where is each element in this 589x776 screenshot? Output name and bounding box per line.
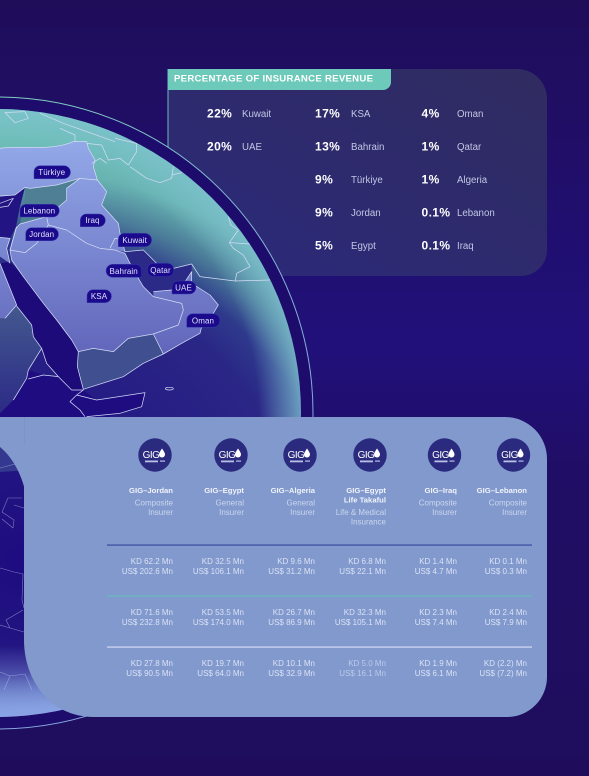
- column: GIG-Lebanon: US$ 0.3 Mn: [485, 567, 527, 576]
- column: GIG-Algeria: General: [287, 498, 315, 508]
- label: Qatar: Qatar: [150, 266, 171, 275]
- column: GIG-Iraq: Composite: [419, 498, 458, 508]
- column: GIG-Jordan: Insurer: [148, 508, 173, 517]
- column: GIG-Egypt: General: [216, 498, 244, 508]
- column: GIG-Egypt: KD 32.5 Mn: [202, 557, 244, 566]
- column: GIG-Egypt: GIG–Egypt: [204, 486, 244, 495]
- revenue list: Bahrain: [351, 142, 384, 153]
- lower Africa navy land: [0, 370, 144, 417]
- icon: GIG logo: GIG: [501, 450, 519, 461]
- revenue list: 5%: [315, 238, 333, 252]
- column: GIG-Iraq: KD 1.9 Mn: [419, 659, 457, 668]
- label: Türkiye: Türkiye: [38, 168, 66, 177]
- column: GIG-Jordan: US$ 232.8 Mn: [122, 618, 173, 627]
- panel heading tab: PERCENTAGE OF INSURANCE REVENUE: [174, 74, 374, 84]
- label: KSA: [87, 290, 112, 303]
- revenue list: Qatar: [457, 142, 482, 153]
- column: GIG-Egypt Life Takaful: GIG–Egypt: [346, 486, 386, 495]
- icon: GIG logo: [138, 438, 172, 472]
- label: UAE: [172, 281, 196, 294]
- panel: percentage of insurance revenue: [168, 69, 547, 276]
- highlighted land: [0, 142, 97, 196]
- icon: GIG logo: GIG: [219, 450, 236, 461]
- column: GIG-Iraq: US$ 6.1 Mn: [415, 669, 457, 678]
- revenue list: KSA: [351, 109, 371, 120]
- column: GIG-Iraq: US$ 7.4 Mn: [415, 618, 457, 627]
- column: GIG-Egypt: US$ 174.0 Mn: [193, 618, 244, 627]
- revenue list: 17%: [315, 106, 340, 120]
- label: Lebanon: Lebanon: [23, 206, 55, 216]
- column: GIG-Egypt: KD 19.7 Mn: [202, 659, 244, 668]
- column: GIG-Egypt Life Takaful: Life & Medical: [336, 508, 386, 517]
- icon: GIG logo: GIG: [432, 450, 450, 461]
- revenue list: 9%: [315, 172, 333, 186]
- column: GIG-Iraq: [415, 438, 461, 678]
- icon: GIG logo: [214, 438, 248, 472]
- column: GIG-Egypt: Insurer: [219, 508, 244, 517]
- revenue list: Egypt: [351, 241, 376, 252]
- icon: GIG logo: GIG: [143, 450, 160, 461]
- column: GIG-Egypt: US$ 106.1 Mn: [193, 567, 244, 576]
- label: Jordan: [26, 228, 58, 241]
- revenue list: 22%: [207, 106, 232, 120]
- column: GIG-Iraq: KD 2.3 Mn: [419, 608, 457, 617]
- column: GIG-Algeria: US$ 32.9 Mn: [268, 669, 315, 678]
- border lines: [0, 142, 97, 196]
- column: GIG-Algeria: Insurer: [290, 508, 315, 517]
- label: Kuwait: [118, 233, 152, 247]
- column: GIG-Jordan: KD 71.6 Mn: [131, 608, 173, 617]
- revenue list: 1%: [422, 140, 440, 154]
- column: GIG-Iraq: GIG–Iraq: [425, 486, 457, 495]
- column: GIG-Iraq: KD 1.4 Mn: [419, 557, 457, 566]
- column: GIG-Iraq: Insurer: [432, 508, 457, 517]
- panel: subsidiaries table: [0, 417, 547, 717]
- revenue list: 13%: [315, 140, 340, 154]
- column: GIG-Lebanon: KD 2.4 Mn: [489, 608, 527, 617]
- column: GIG-Egypt Life Takaful: US$ 105.1 Mn: [335, 618, 386, 627]
- icon: GIG logo: GIG: [358, 450, 375, 461]
- panel heading tab: [168, 69, 391, 90]
- column: GIG-Lebanon: Insurer: [502, 508, 527, 517]
- label: Qatar: [147, 263, 174, 277]
- column: GIG-Jordan: [122, 438, 174, 678]
- label: Bahrain: Bahrain: [110, 267, 138, 276]
- revenue list: 0.1%: [422, 238, 450, 252]
- label: Iraq: [80, 214, 105, 227]
- icon: GIG logo: [353, 438, 387, 472]
- column: GIG-Algeria: US$ 86.9 Mn: [268, 618, 315, 627]
- revenue list: 4%: [422, 106, 440, 120]
- column: GIG-Algeria: [268, 438, 317, 678]
- column: GIG-Egypt Life Takaful: KD 6.8 Mn: [348, 557, 386, 566]
- label: Oman: Oman: [192, 316, 214, 326]
- dark seas: [0, 187, 25, 238]
- label: Bahrain: [106, 264, 142, 277]
- revenue list: Iraq: [457, 241, 474, 252]
- revenue list: Lebanon: [457, 208, 495, 219]
- revenue list: 9%: [315, 206, 333, 220]
- column: GIG-Jordan: GIG–Jordan: [129, 486, 173, 495]
- revenue list: Oman: [457, 109, 483, 120]
- column: GIG-Jordan: KD 27.8 Mn: [131, 659, 173, 668]
- revenue list: [207, 106, 495, 252]
- column: GIG-Lebanon: Composite: [489, 498, 528, 508]
- column: GIG-Algeria: GIG–Algeria: [271, 486, 316, 495]
- icon: GIG logo: [428, 438, 461, 472]
- column: GIG-Egypt Life Takaful: Insurance: [351, 518, 387, 526]
- revenue list: Algeria: [457, 175, 488, 186]
- revenue list: Kuwait: [242, 109, 271, 120]
- column: GIG-Egypt Life Takaful: US$ 16.1 Mn: [339, 669, 386, 678]
- column: GIG-Algeria: KD 9.6 Mn: [277, 557, 315, 566]
- column: GIG-Algeria: KD 10.1 Mn: [273, 659, 315, 668]
- label: Lebanon: [20, 204, 59, 217]
- revenue list: Jordan: [351, 208, 381, 219]
- column: GIG-Egypt Life Takaful: KD 5.0 Mn: [348, 659, 386, 668]
- revenue list: Türkiye: [351, 175, 383, 186]
- label: Iraq: Iraq: [85, 216, 100, 225]
- faint lower map lines: [0, 455, 32, 690]
- row dividers: [107, 544, 532, 648]
- label: Jordan: Jordan: [29, 230, 54, 239]
- column: GIG-Jordan: US$ 202.6 Mn: [122, 567, 173, 576]
- column: GIG-Lebanon: US$ 7.9 Mn: [485, 618, 527, 627]
- column: GIG-Lebanon: KD (2.2) Mn: [484, 659, 527, 668]
- revenue list: 1%: [422, 172, 440, 186]
- label: Oman: [187, 314, 220, 327]
- column: GIG-Algeria: US$ 31.2 Mn: [268, 567, 315, 576]
- revenue list: UAE: [242, 142, 262, 153]
- icon: GIG logo: GIG: [288, 450, 305, 461]
- column: GIG-Lebanon: [477, 438, 530, 678]
- column: GIG-Lebanon: KD 0.1 Mn: [489, 557, 527, 566]
- column: GIG-Lebanon: GIG–Lebanon: [477, 486, 527, 495]
- column: GIG-Lebanon: US$ (7.2) Mn: [479, 669, 527, 678]
- revenue list: 0.1%: [422, 206, 450, 220]
- column: GIG-Egypt: US$ 64.0 Mn: [197, 669, 244, 678]
- column: GIG-Jordan: US$ 90.5 Mn: [126, 669, 173, 678]
- label: KSA: KSA: [91, 292, 108, 301]
- column: GIG-Egypt Life Takaful: Life Takaful: [344, 496, 386, 504]
- country labels: [20, 166, 220, 327]
- column: GIG-Jordan: KD 62.2 Mn: [131, 557, 173, 566]
- column: GIG-Egypt Life Takaful: US$ 22.1 Mn: [339, 567, 386, 576]
- globe outer ring highlight: [0, 97, 313, 729]
- column: GIG-Algeria: KD 26.7 Mn: [273, 608, 315, 617]
- column: GIG-Jordan: Composite: [135, 498, 174, 508]
- muted land: [20, 178, 80, 224]
- label: Kuwait: Kuwait: [122, 236, 148, 245]
- column: GIG-Egypt Life Takaful: KD 32.3 Mn: [344, 608, 386, 617]
- revenue list: 20%: [207, 140, 232, 154]
- column: GIG-Egypt: [193, 438, 248, 678]
- column: GIG-Iraq: US$ 4.7 Mn: [415, 567, 457, 576]
- column: GIG-Egypt: KD 53.5 Mn: [202, 608, 244, 617]
- column: GIG-Egypt Life Takaful: [335, 438, 387, 678]
- globe map: [0, 97, 313, 729]
- icon: GIG logo: [283, 438, 317, 472]
- label: UAE: UAE: [175, 284, 192, 292]
- lower globe shading: [0, 447, 18, 472]
- icon: GIG logo: [497, 438, 530, 472]
- label: Türkiye: [34, 166, 70, 179]
